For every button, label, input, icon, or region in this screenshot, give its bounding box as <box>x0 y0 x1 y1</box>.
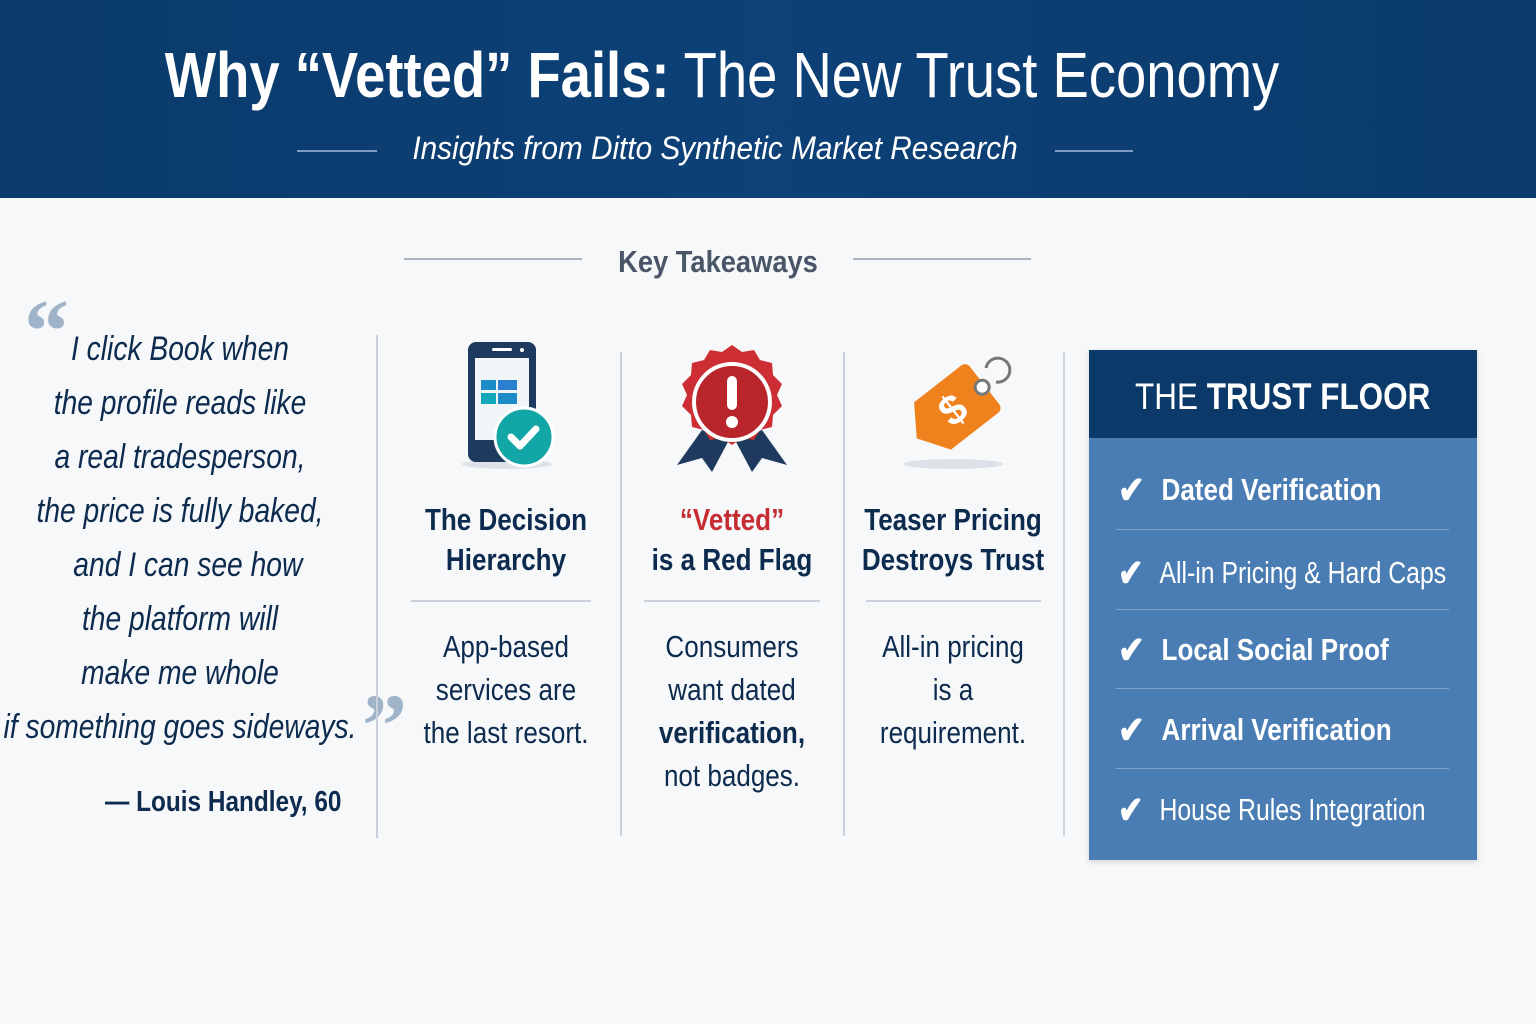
item: local social proof: Local Social Proof <box>1162 632 1389 667</box>
quote text: if something goes sideways. <box>4 708 356 746</box>
heading: The Decision <box>425 502 587 537</box>
panel heading <box>1089 350 1477 438</box>
attribution: — Louis Handley, 60 <box>105 786 341 818</box>
body text: Consumers <box>665 629 799 664</box>
heading <box>425 502 587 577</box>
panel: the trust floor <box>1089 350 1477 860</box>
heading: is a Red Flag <box>652 542 812 577</box>
panel heading: THE TRUST FLOOR <box>1135 376 1431 417</box>
icon: open quote: “ <box>24 282 69 381</box>
heading <box>652 502 812 577</box>
quote text: the price is fully baked, <box>36 492 324 530</box>
item: dated verification <box>1118 470 1382 512</box>
icon: price tag: $ <box>929 384 976 435</box>
body text: App-based <box>443 629 569 664</box>
body text <box>659 629 805 793</box>
heading <box>862 502 1044 577</box>
item: dated verification: ✔ <box>1118 470 1145 512</box>
heading: Destroys Trust <box>862 542 1044 577</box>
item: house rules: ✔ <box>1118 790 1143 832</box>
body text: want dated <box>668 672 796 707</box>
item: arrival verification: ✔ <box>1118 710 1145 752</box>
quote text <box>4 330 356 746</box>
panel: vetted red flag <box>644 345 820 793</box>
quote text: and I can see how <box>73 546 302 584</box>
heading: “Vetted” <box>680 502 784 537</box>
body text: verification, <box>659 715 805 750</box>
quote <box>4 282 407 818</box>
panel: decision hierarchy <box>411 342 591 750</box>
item: local social proof <box>1118 630 1389 672</box>
item: house rules: House Rules Integration <box>1159 792 1426 827</box>
body text: not badges. <box>664 758 800 793</box>
body text: requirement. <box>880 715 1026 750</box>
heading: Teaser Pricing <box>864 502 1042 537</box>
quote text: I click Book when <box>71 330 289 368</box>
item: dated verification: Dated Verification <box>1162 472 1382 507</box>
body text: the last resort. <box>423 715 588 750</box>
item: local social proof: ✔ <box>1118 630 1145 672</box>
item: all-in pricing: All-in Pricing & Hard Caps <box>1159 555 1446 590</box>
section heading: key takeaways: Key Takeaways <box>618 244 818 279</box>
item: arrival verification: Arrival Verification <box>1162 712 1392 747</box>
title: Why “Vetted” Fails: The New Trust Economy <box>165 39 1279 111</box>
heading: Hierarchy <box>446 542 566 577</box>
icon: price tag <box>903 356 1012 469</box>
icon: close quote: ” <box>362 677 407 776</box>
quote text: the platform will <box>82 600 278 638</box>
body text: is a <box>933 672 973 707</box>
icon: red badge <box>677 345 787 472</box>
quote text: a real tradesperson, <box>55 438 305 476</box>
quote text: make me whole <box>81 654 279 692</box>
panel: teaser pricing <box>862 356 1044 750</box>
body text <box>880 629 1026 750</box>
subtitle: Insights from Ditto Synthetic Market Research <box>412 130 1018 166</box>
item: all-in pricing: ✔ <box>1118 552 1143 594</box>
body text <box>423 629 588 750</box>
icon: phone with check <box>462 342 552 469</box>
body text: services are <box>436 672 576 707</box>
header banner <box>0 0 1536 198</box>
quote text: the profile reads like <box>54 384 306 422</box>
body text: All-in pricing <box>882 629 1024 664</box>
